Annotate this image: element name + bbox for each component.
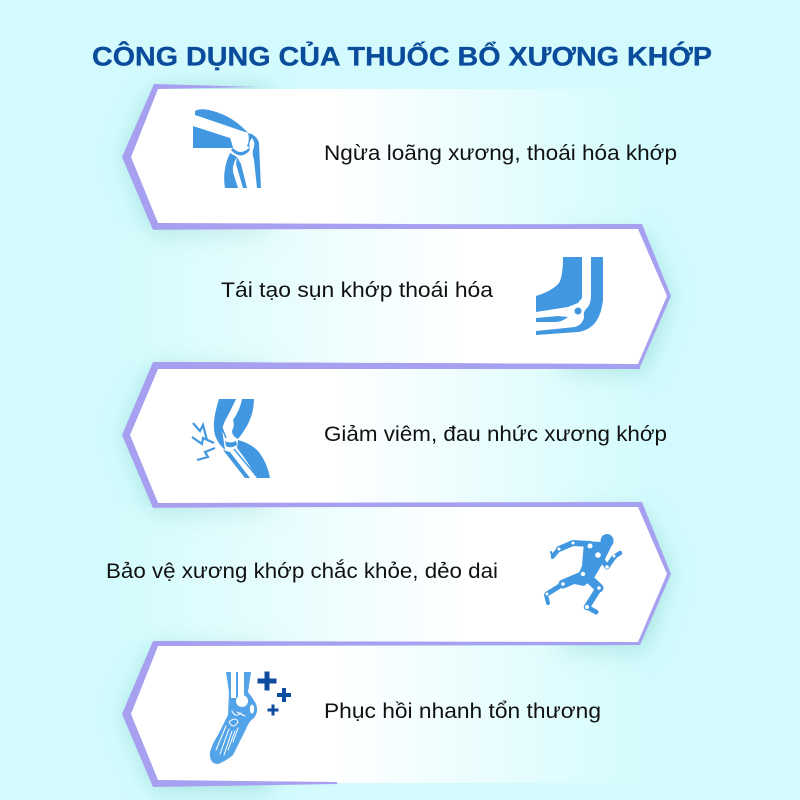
icon: running figure <box>546 534 620 612</box>
text: ngừa loãng xương: Ngừa loãng xương, thoái hóa khớp <box>324 141 677 165</box>
icon: painful knee <box>192 399 270 478</box>
text: phục hồi: Phục hồi nhanh tổn thương <box>324 699 601 723</box>
panel: giảm viêm <box>122 362 667 508</box>
soft shadows <box>124 88 670 790</box>
panel: ngừa loãng xương <box>122 84 677 230</box>
icon: knee joint <box>193 109 261 188</box>
text: tái tạo sụn khớp: Tái tạo sụn khớp thoái hóa <box>221 278 493 302</box>
text: giảm viêm: Giảm viêm, đau nhức xương khớp <box>324 422 667 446</box>
icon: foot bones <box>210 672 291 764</box>
panel: bảo vệ xương khớp <box>106 502 671 645</box>
icon: plus signs <box>258 672 291 716</box>
text: bảo vệ xương khớp: Bảo vệ xương khớp chắc khỏe, dẻo dai <box>106 558 498 583</box>
icon: elbow joint <box>536 257 603 335</box>
panel: phục hồi <box>122 641 660 787</box>
panel: tái tạo sụn khớp <box>110 224 671 367</box>
title: CÔNG DỤNG CỦA THUỐC BỔ XƯƠNG KHỚP <box>92 40 712 72</box>
